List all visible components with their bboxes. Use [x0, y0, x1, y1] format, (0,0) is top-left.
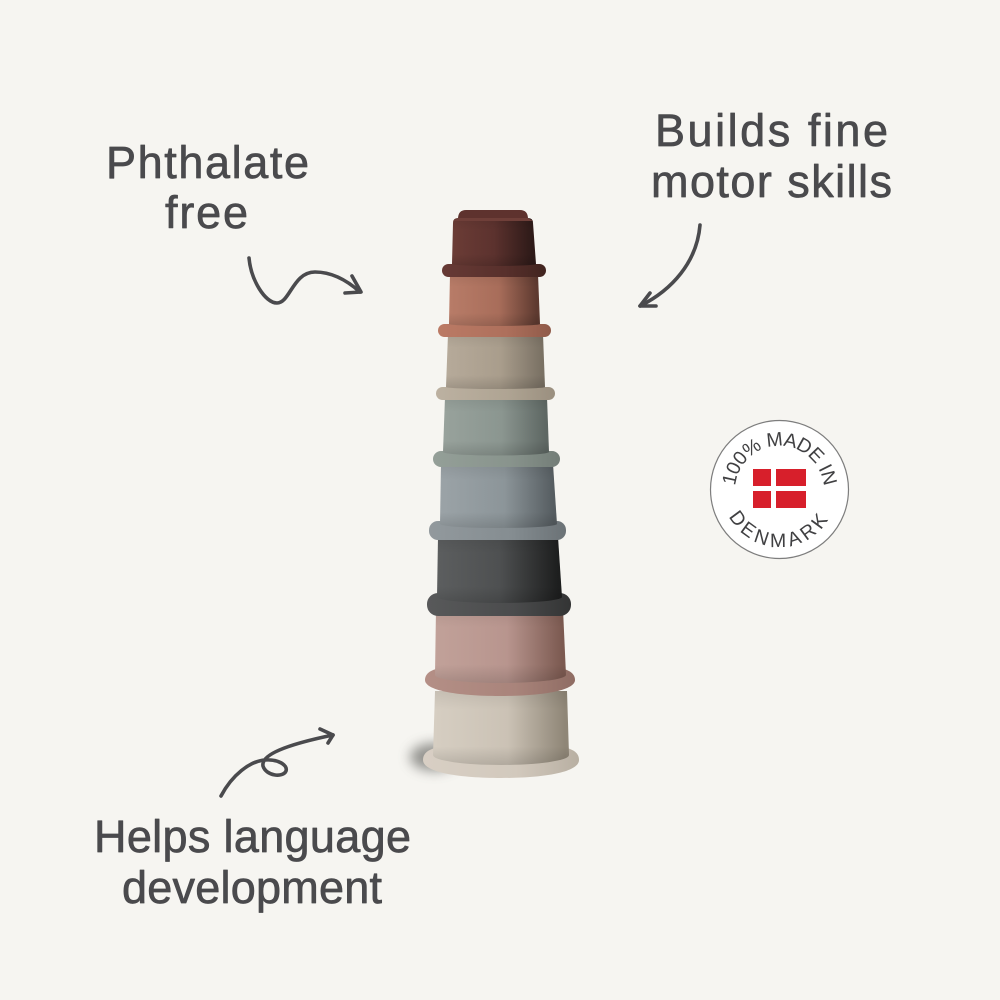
cup 1: dark brown: [442, 210, 546, 277]
cup 3: taupe: [436, 334, 555, 400]
heading: Helps language development: Helps language: [94, 811, 411, 862]
arrow: phthalate free to stack: [249, 258, 361, 303]
cup 2: terracotta: [438, 274, 551, 337]
cast shadow: [410, 743, 458, 771]
badge: 100% made in Denmark: [710, 420, 850, 560]
badge text: bottom arc: DENMARK: [729, 510, 828, 548]
cup 6: charcoal: [427, 537, 571, 616]
heading: Helps language development: [94, 811, 411, 913]
heading: Builds fine motor skills: motor skills: [651, 156, 892, 207]
heading: Builds fine motor skills: [651, 105, 892, 207]
cup 5: blue grey: [429, 464, 566, 540]
heading: Helps language development: development: [122, 862, 382, 913]
heading: Phthalate free: Phthalate: [106, 137, 309, 188]
badge text: top arc: 100% MADE IN: [722, 432, 837, 485]
arrow: language development to stack: [221, 729, 333, 796]
heading: Phthalate free: [106, 137, 309, 238]
cup 7: blush: [425, 609, 575, 696]
icon: Danish flag: [753, 469, 806, 508]
cup 4: sage: [433, 397, 560, 467]
cup 8: cream: [423, 691, 579, 778]
stacking cups tower: [410, 210, 579, 778]
heading: Builds fine motor skills: Builds fine: [655, 105, 888, 156]
arrow: motor skills to stack: [640, 225, 700, 306]
heading: Phthalate free: free: [165, 187, 248, 238]
